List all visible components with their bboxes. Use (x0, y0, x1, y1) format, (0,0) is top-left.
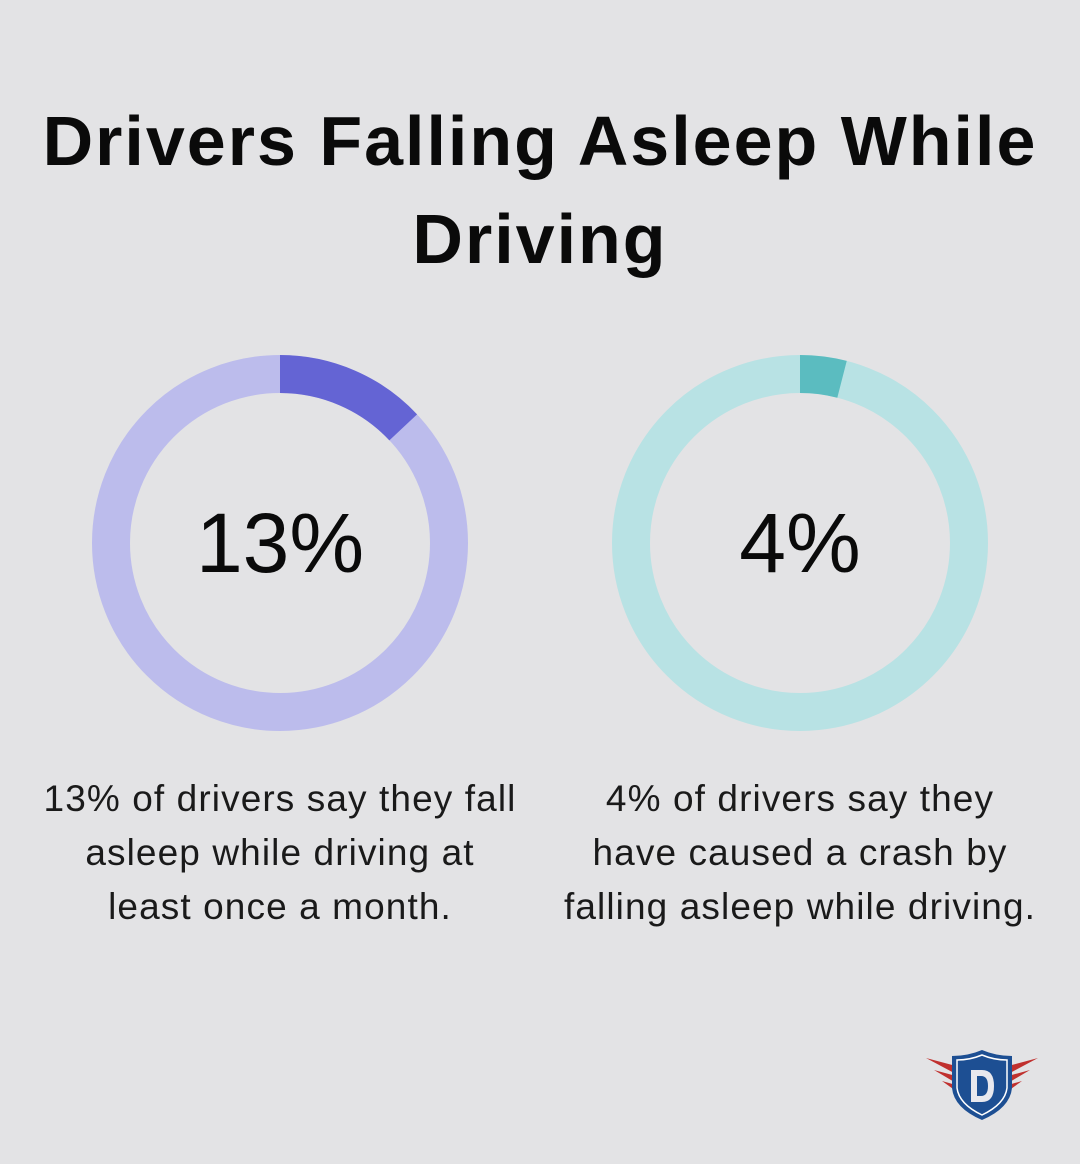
title (43, 102, 1037, 278)
caption: 4%: falling asleep while driving. (564, 886, 1036, 927)
stat: 13%: 13% (196, 496, 364, 590)
title: Driving (412, 200, 668, 278)
caption: 4% (564, 778, 1036, 927)
title: Drivers Falling Asleep While (43, 102, 1037, 180)
caption: 4%: have caused a crash by (592, 832, 1008, 873)
caption: 13%: 13% of drivers say they fall (44, 778, 516, 819)
caption: 13%: asleep while driving at (85, 832, 475, 873)
caption: 13% (44, 778, 516, 927)
icon: logo shield with wings (926, 1050, 1038, 1120)
stat: 4%: 4% (739, 496, 861, 590)
caption: 13%: least once a month. (108, 886, 452, 927)
caption: 4%: 4% of drivers say they (606, 778, 994, 819)
